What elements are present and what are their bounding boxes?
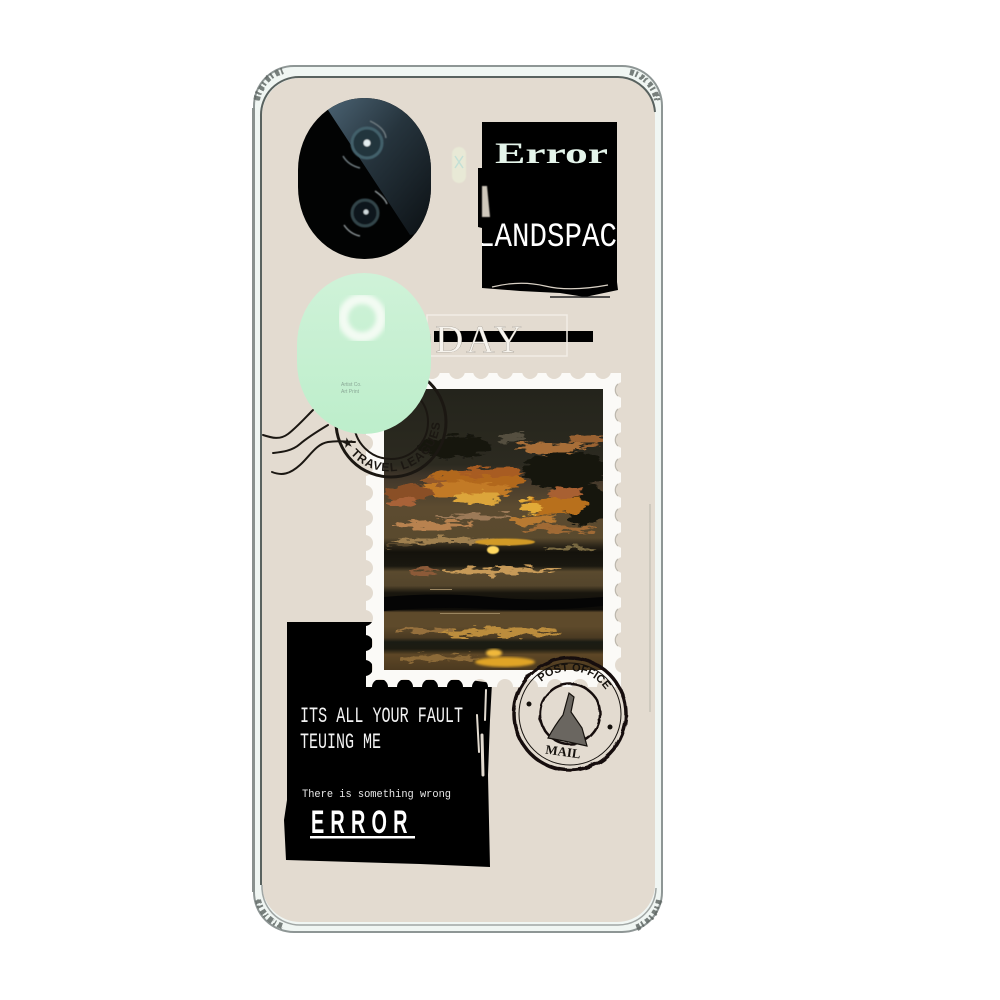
perforation shading [615,384,618,646]
white smear [482,186,490,217]
postmark: post office mail [512,656,628,772]
upper lens [343,121,386,168]
black label: error landspace [477,122,618,297]
ring light [343,299,381,337]
text: error: Error [495,137,608,170]
text: teuing me: TEUING ME [300,730,381,755]
postmark: post office mail: POST OFFICE [537,664,612,690]
tiny print [341,382,362,395]
text: there is something wrong: There is something wrong [302,789,451,801]
camera module [298,98,431,259]
text: error: ERROR [311,804,414,840]
corner bumpers [257,70,659,927]
wavy cancellation lines [263,410,355,474]
tiny print: Artist Co. [341,382,362,388]
today tag [378,315,593,361]
postmark: post office mail: MAIL [545,742,582,761]
camera flash [452,147,466,183]
mint camera pod [297,273,431,434]
postmark: travel leagues [262,380,448,478]
postmark: travel leagues: ★ TRAVEL LEAGUES [342,423,440,472]
tiny print: Art Print [341,389,360,395]
case back panel [262,78,655,922]
postage stamp [366,373,621,687]
black label: ITS ALL YOUR FAULT [284,622,492,867]
text: its all your fault: ITS ALL YOUR FAULT [300,704,463,729]
today tag: TODAY [378,318,522,361]
phone case [254,66,662,932]
lower lens [344,191,387,236]
sunset photo [384,389,612,670]
text: landspac: LANDSPAC [477,219,617,257]
